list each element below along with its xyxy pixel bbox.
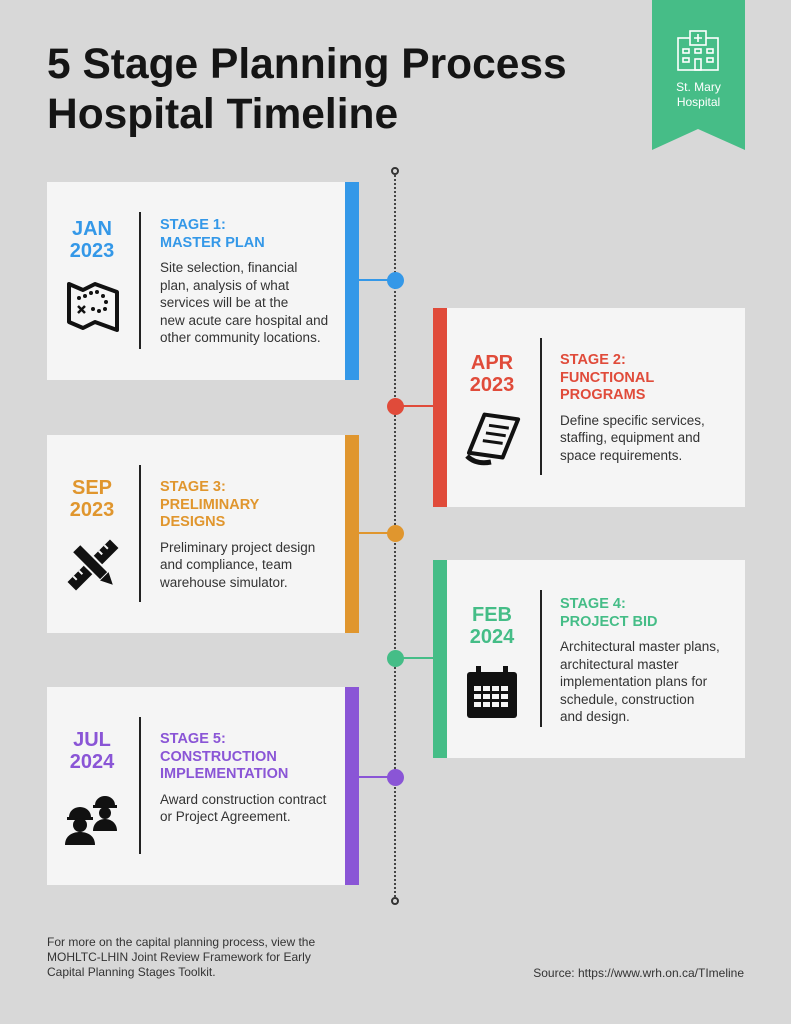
card: stage 1: MASTER PLAN (160, 234, 265, 250)
card: stage 2: staffing, equipment and (560, 430, 700, 445)
icon: calendar (467, 666, 517, 718)
card: stage 2 (433, 308, 745, 507)
card: stage 5: IMPLEMENTATION (160, 766, 288, 782)
card: stage 2: Define specific services, (560, 412, 705, 428)
footer note: MOHLTC-LHIN Joint Review Framework for Early (47, 950, 311, 964)
card: stage 5: or Project Agreement. (160, 809, 291, 824)
ribbon: St. Mary Hospital (652, 0, 745, 150)
card: stage 4: FEB (472, 604, 512, 626)
footer note: For more on the capital planning process, view the (47, 935, 315, 949)
ribbon: St. Mary Hospital: St. Mary (676, 80, 721, 94)
card: stage 1: JAN (72, 218, 112, 240)
card: stage 4: Architectural master plans, (560, 639, 720, 654)
card: stage 4 (433, 560, 745, 758)
card: stage 2: space requirements. (560, 448, 682, 462)
card: stage 5: JUL (73, 729, 111, 751)
card: stage 2: 2023 (470, 374, 514, 396)
card: stage 4: 2024 (470, 626, 514, 648)
icon: pencil and ruler (68, 540, 118, 590)
card: stage 5: Award construction contract (160, 792, 326, 806)
card: stage 3 (47, 435, 359, 633)
card: stage 3: warehouse simulator. (160, 574, 288, 590)
card: stage 1: new acute care hospital and (160, 312, 328, 328)
card: stage 1 (47, 182, 359, 380)
card: stage 1: 2023 (70, 240, 114, 262)
card: stage 4: implementation plans for (560, 674, 707, 689)
card: stage 3: 2023 (70, 499, 114, 521)
card: stage 1: plan, analysis of what (160, 278, 289, 292)
card: stage 3: DESIGNS (160, 514, 225, 530)
card: stage 4: architectural master (560, 656, 679, 672)
card: stage 4: schedule, construction (560, 692, 694, 706)
title: 5 Stage Planning Process (47, 41, 567, 88)
card: stage 1: STAGE 1: (160, 217, 226, 233)
card: stage 5: STAGE 5: (160, 731, 226, 747)
card: stage 2: FUNCTIONAL (560, 370, 654, 386)
card: stage 1: services will be at the (160, 295, 288, 310)
card: stage 5: 2024 (70, 751, 114, 773)
card: stage 5 (47, 687, 359, 885)
card: stage 3: SEP (72, 477, 112, 499)
ribbon: St. Mary Hospital: Hospital (677, 95, 720, 109)
card: stage 4: and design. (560, 709, 630, 724)
timeline line (394, 171, 396, 901)
card: stage 3: STAGE 3: (160, 479, 226, 495)
title: Hospital Timeline (47, 91, 398, 138)
source: Source: https://www.wrh.on.ca/TImeline (533, 966, 744, 980)
card: stage 3: and compliance, team (160, 557, 292, 572)
card: stage 4: PROJECT BID (560, 614, 658, 630)
icon: document (465, 412, 520, 466)
card: stage 2: PROGRAMS (560, 387, 645, 403)
card: stage 3: Preliminary project design (160, 540, 315, 554)
card: stage 5: CONSTRUCTION (160, 748, 277, 764)
card: stage 2: STAGE 2: (560, 352, 626, 368)
title (47, 41, 567, 138)
footer note (47, 935, 315, 979)
card: stage 1: Site selection, financial (160, 260, 297, 275)
card: stage 1: other community locations. (160, 330, 321, 345)
card: stage 4: STAGE 4: (560, 596, 626, 612)
card: stage 3: PRELIMINARY (160, 496, 259, 512)
footer note: Capital Planning Stages Toolkit. (47, 965, 216, 979)
icon: map (67, 282, 119, 332)
icon: workers (65, 796, 117, 845)
card: stage 2: APR (471, 352, 513, 374)
